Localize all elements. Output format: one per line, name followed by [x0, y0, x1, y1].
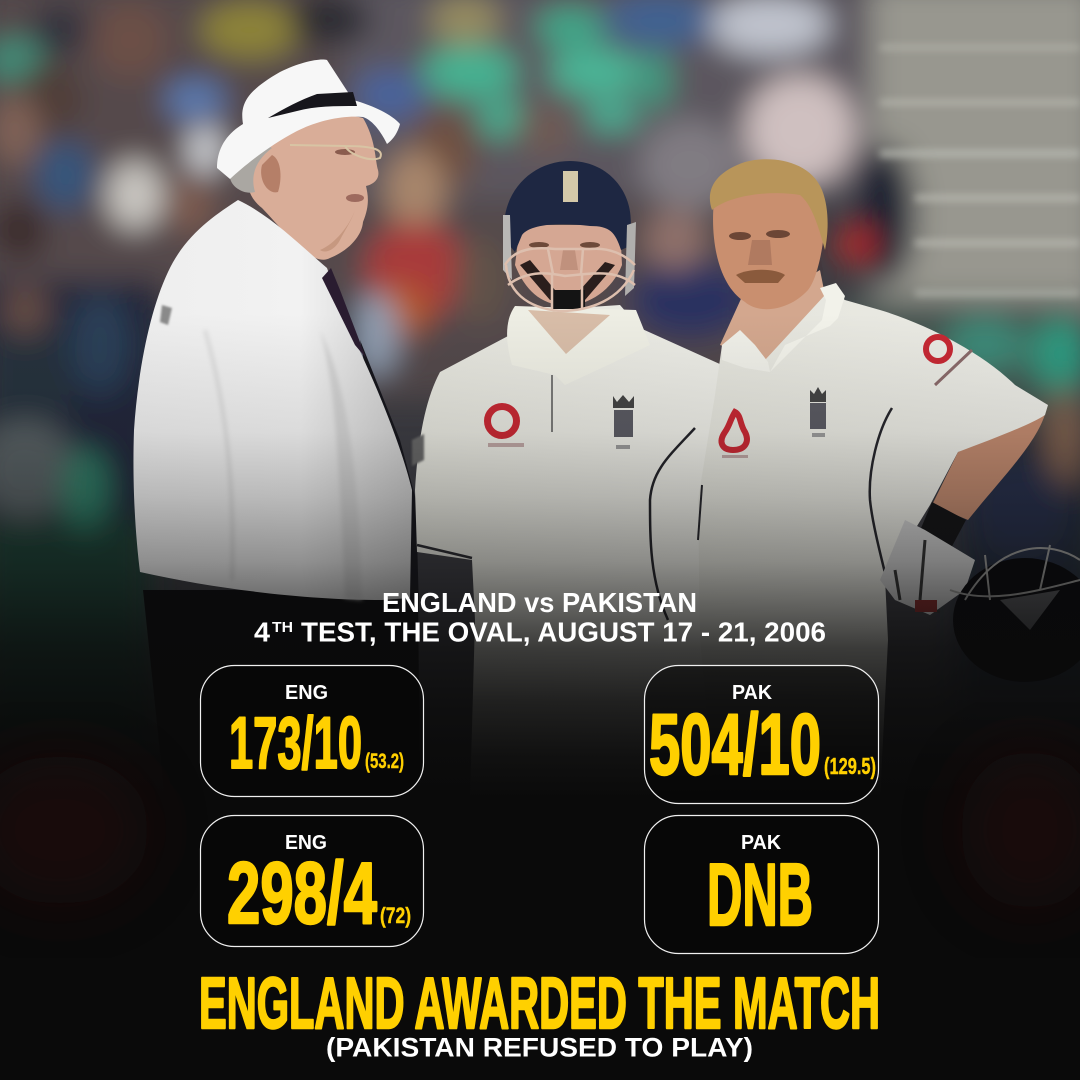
ECB crest on chest [810, 387, 826, 437]
score card: England second innings [200, 816, 424, 946]
score card: England second innings: 298/4 [227, 845, 377, 942]
score card: Pakistan first innings: (129.5) [824, 753, 876, 779]
batsman helmet [504, 161, 632, 252]
blond batsman face [713, 185, 826, 309]
umpire shirt [133, 200, 412, 600]
score card: Pakistan second innings: PAK [741, 832, 782, 854]
batsman shirt [415, 305, 722, 800]
match heading [254, 587, 826, 648]
match heading: TEST, THE OVAL, AUGUST 17 - 21, 2006 [301, 616, 826, 648]
batsman collar [507, 306, 650, 385]
umpire eye [335, 149, 355, 155]
wrist band [919, 502, 966, 550]
score card: England second innings: (72) [380, 903, 411, 928]
vodafone pear logo on chest [722, 412, 748, 458]
umpire neck and face [247, 116, 378, 260]
score card: England first innings: 173/10 [229, 703, 362, 784]
photo: batsman with blond hair [698, 159, 1080, 800]
score card: Pakistan first innings [644, 666, 878, 804]
umpire hat [217, 60, 400, 179]
match heading: 4 [254, 616, 270, 648]
held helmet [953, 558, 1080, 682]
batsman face [515, 225, 622, 306]
helmet crest [563, 171, 578, 202]
grey stand steps [880, 45, 1080, 296]
right arm [932, 410, 1046, 520]
result subheading: (PAKISTAN REFUSED TO PLAY) [326, 1032, 753, 1062]
photo: batsman with helmet [412, 161, 722, 800]
blond batsman collar [722, 330, 770, 372]
blond batsman shirt [698, 290, 1048, 800]
blond batsman trim [870, 408, 892, 585]
vodafone sleeve logo [926, 337, 972, 385]
score card: England first innings: (53.2) [365, 750, 404, 773]
score card: England second innings: ENG [285, 832, 327, 854]
vodafone logo on batsman [488, 406, 524, 447]
score card: Pakistan second innings [644, 816, 878, 954]
match heading: ENGLAND vs PAKISTAN [382, 587, 697, 618]
shirt fold shading [320, 330, 362, 600]
match heading: TH [272, 619, 293, 636]
dark red band [0, 750, 1080, 910]
score card: Pakistan second innings: DNB [707, 845, 813, 944]
blond hair [710, 159, 828, 250]
umpire sleeve logo [160, 305, 172, 325]
batsman sleeve trim [417, 545, 472, 558]
umpire tie [322, 268, 366, 358]
batting glove [880, 520, 975, 615]
hat band [268, 92, 357, 118]
umpire grey hair [230, 143, 272, 193]
batsman sleeve badge [412, 434, 424, 466]
score card: England first innings [200, 666, 424, 796]
photo: umpire [133, 60, 420, 800]
score card: England first innings: ENG [285, 682, 328, 704]
umpire glasses [290, 145, 381, 159]
umpire trousers [143, 590, 420, 800]
batsman helmet straps [520, 260, 615, 300]
score card: Pakistan first innings: 504/10 [649, 697, 821, 793]
umpire dark jacket edge [360, 340, 419, 610]
ECB crest on batsman [613, 395, 634, 449]
blond batsman neck [720, 270, 825, 360]
score card: Pakistan first innings: PAK [732, 682, 773, 704]
helmet grille [505, 248, 635, 311]
